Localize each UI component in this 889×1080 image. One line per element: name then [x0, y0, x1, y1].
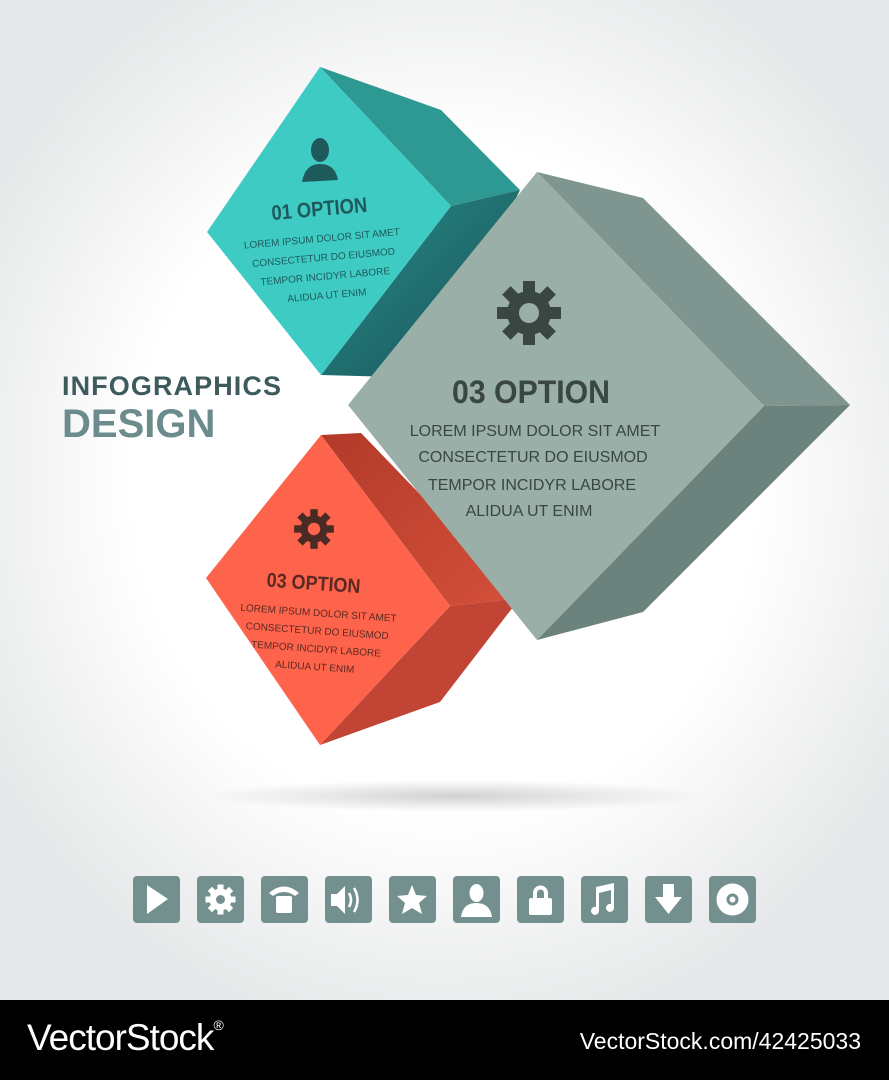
gray cube: ALIDUA UT ENIM [466, 503, 592, 520]
teal cube: LOREM IPSUM DOLOR SIT AMET [244, 227, 400, 252]
red cube: LOREM IPSUM DOLOR SIT AMET [240, 603, 397, 625]
footer: VectorStock® [27, 1017, 223, 1058]
icon: gear red [294, 509, 334, 549]
red cube: TEMPOR INCIDYR LABORE [251, 640, 381, 660]
gray cube: LOREM IPSUM DOLOR SIT AMET [410, 423, 660, 440]
red cube: ALIDUA UT ENIM [275, 659, 355, 676]
footer [0, 1000, 889, 1080]
footer: VectorStock.com/42425033 [580, 1028, 861, 1054]
teal cube: TEMPOR INCIDYR LABORE [260, 266, 391, 288]
icon: gear [497, 281, 561, 345]
red cube [206, 433, 520, 745]
teal cube: ALIDUA UT ENIM [287, 287, 367, 305]
gray cube: 03 OPTION [452, 374, 610, 410]
title: DESIGN [62, 402, 215, 446]
icon row [133, 876, 756, 923]
red cube: 03 OPTION [266, 570, 361, 598]
teal cube [207, 67, 520, 378]
title: INFOGRAPHICS [62, 371, 281, 401]
red cube: CONSECTETUR DO EIUSMOD [245, 621, 389, 642]
title [62, 371, 281, 446]
icon: person [302, 138, 338, 182]
teal cube: CONSECTETUR DO EIUSMOD [252, 247, 395, 270]
gray cube: CONSECTETUR DO EIUSMOD [418, 449, 648, 466]
teal cube: 01 OPTION [271, 194, 368, 225]
gray cube: TEMPOR INCIDYR LABORE [428, 477, 636, 494]
shadow [205, 780, 705, 812]
gray cube [348, 172, 850, 640]
